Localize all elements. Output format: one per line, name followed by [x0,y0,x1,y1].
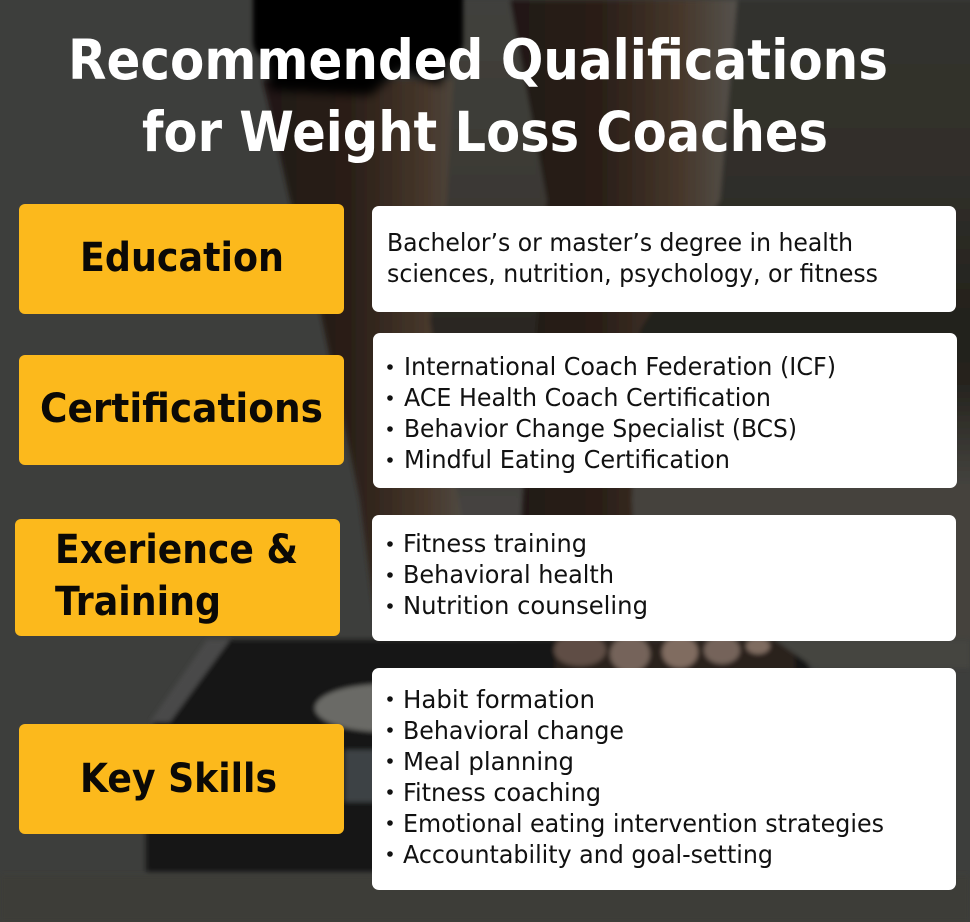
panel: certifications list: Mindful Eating Certification [404,445,730,474]
panel: certifications label [19,355,344,465]
panel: certifications list [373,333,957,488]
panel: key skills label [19,724,344,834]
panel: experience label [15,519,340,636]
panel: key skills list: Fitness coaching [403,778,601,807]
panel: education details: sciences, nutrition, psychology, or fitness [387,259,878,288]
panel: education details: Bachelor’s or master’s degree in health [387,228,853,257]
panel: key skills list: Emotional eating intervention strategies [403,809,884,838]
panel: key skills list: Meal planning [403,747,574,776]
panel: certifications list: Behavior Change Specialist (BCS) [404,414,797,443]
panel: certifications label: Certifications [40,386,323,432]
panel: certifications list: International Coach Federation (ICF) [404,352,836,381]
panel: experience label: Training [55,579,221,625]
title [68,28,888,164]
panel: key skills list: Behavioral change [403,716,624,745]
panel: certifications list: ACE Health Coach Certification [404,383,771,412]
panel: experience list: Behavioral health [403,560,614,589]
panel: experience list [372,515,956,641]
title: for Weight Loss Coaches [142,100,828,164]
panel: experience label: Exerience & [55,527,298,573]
panel: experience list: Nutrition counseling [403,591,648,620]
panel: education label [19,204,344,314]
panel: education details [372,206,956,312]
panel: key skills list: Habit formation [403,685,595,714]
panel: key skills list [372,668,956,890]
panel: education label: Education [80,235,284,281]
panel: experience list: Fitness training [403,529,587,558]
panel: key skills label: Key Skills [80,756,277,802]
panel: key skills list: Accountability and goal-setting [403,840,773,869]
title: Recommended Qualifications [68,28,888,92]
